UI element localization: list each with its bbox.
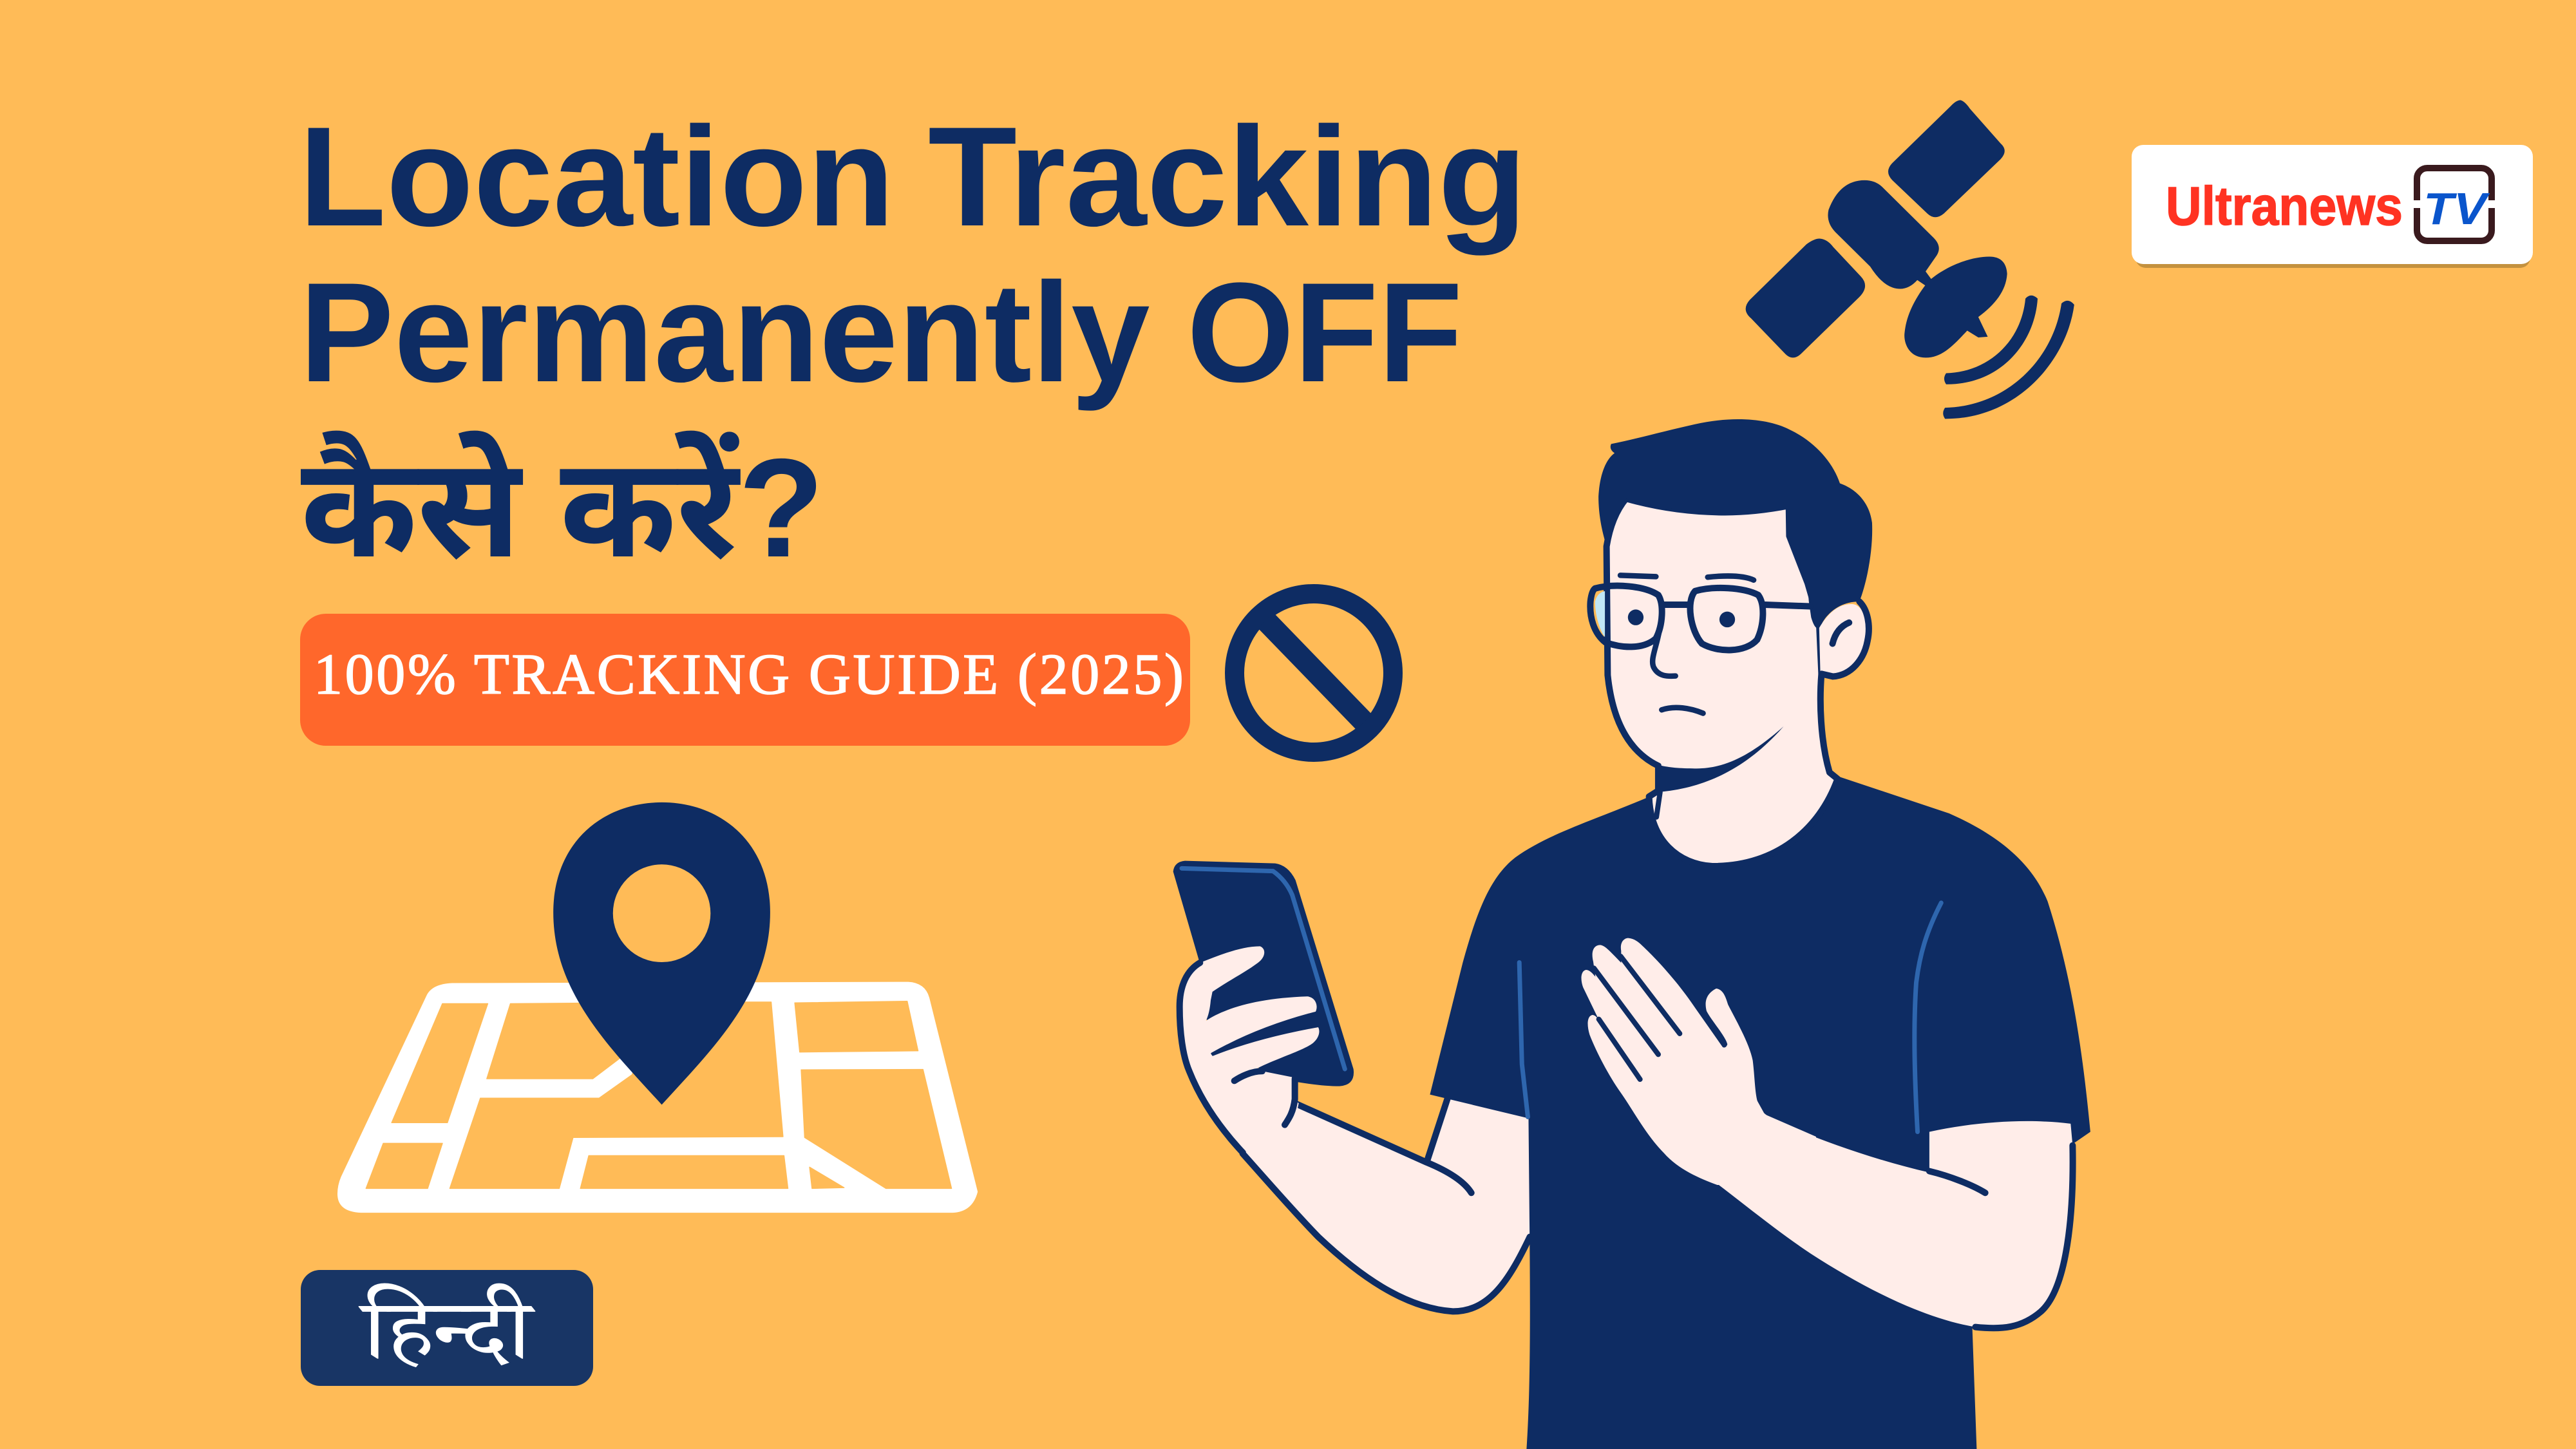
left hand bbox=[1180, 946, 1320, 1153]
right arm bbox=[1686, 1091, 2073, 1328]
location pin bbox=[553, 802, 770, 1104]
map bbox=[339, 983, 976, 1211]
title line 2: Permanently bbox=[299, 253, 1150, 412]
badge: hindi bbox=[301, 1270, 593, 1386]
right hand bbox=[1582, 938, 1816, 1185]
left forearm bbox=[1243, 1098, 1530, 1311]
phone bbox=[1173, 861, 1354, 1086]
neck and face bbox=[1607, 498, 1837, 866]
logo: Ultranews TV: Ultranews bbox=[2166, 176, 2403, 236]
title line 2: OFF bbox=[1187, 253, 1463, 412]
eyebrows, nose, mouth bbox=[1620, 575, 1754, 714]
logo: Ultranews TV: TV bbox=[2423, 184, 2490, 234]
badge: hindi: हिन्दी bbox=[358, 1283, 536, 1376]
badge: tracking guide bbox=[300, 614, 1190, 746]
title bbox=[299, 97, 1527, 587]
icon: prohibited sign bbox=[1235, 594, 1393, 752]
glasses bbox=[1590, 586, 1810, 650]
title line 1: Location bbox=[299, 97, 895, 256]
t-shirt bbox=[1430, 776, 2090, 1449]
title line 3 hindi: कैसे करें? bbox=[301, 430, 824, 587]
illustration: man looking at phone bbox=[1173, 419, 2090, 1449]
icon: satellite with signal waves bbox=[1746, 100, 2074, 419]
ear bbox=[1819, 601, 1869, 676]
badge: tracking guide: 100% TRACKING GUIDE (2025) bbox=[314, 643, 1184, 706]
icon: map with location pin bbox=[339, 802, 976, 1211]
hair bbox=[1598, 419, 1872, 629]
logo: Ultranews TV bbox=[2132, 145, 2533, 268]
head bbox=[1590, 419, 1872, 866]
neck shadow bbox=[1658, 726, 1783, 792]
title line 1 bbox=[299, 97, 1527, 256]
title line 1: Tracking bbox=[928, 97, 1527, 256]
